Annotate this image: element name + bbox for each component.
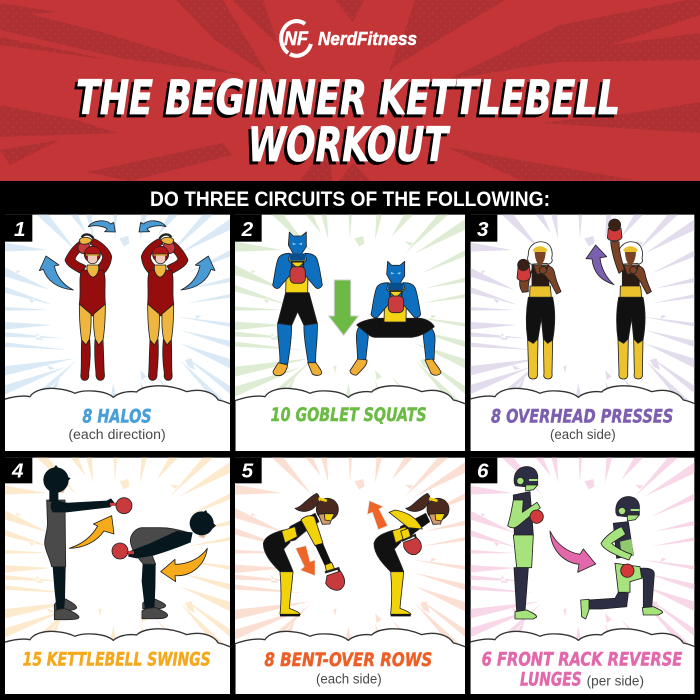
arrow: down xyxy=(296,546,315,576)
header burst streaks xyxy=(0,0,700,181)
figure: arm lowered xyxy=(263,493,345,615)
logo monogram: NF xyxy=(284,29,309,50)
header band xyxy=(0,0,700,181)
arrow: up swing xyxy=(69,516,114,548)
figure: right hero xyxy=(141,234,188,380)
title: WORKOUT xyxy=(248,118,451,173)
subtitle: DO THREE CIRCUITS OF THE FOLLOWING: xyxy=(150,187,550,211)
figure: squatting xyxy=(350,261,441,375)
figure: standing xyxy=(273,232,322,376)
number tab 3: 3 xyxy=(477,218,489,241)
panel 2: goblet squats xyxy=(235,210,468,453)
logo ring xyxy=(281,21,311,56)
exercise note: (per side) xyxy=(587,674,644,689)
number tab 4: 4 xyxy=(11,460,24,483)
arrow: up xyxy=(586,245,614,285)
number tab 1: 1 xyxy=(14,218,25,241)
figure: pressing xyxy=(607,219,651,379)
number tab 4 xyxy=(0,458,32,483)
number tab 1 xyxy=(0,215,32,242)
figure: standing xyxy=(508,467,543,619)
exercise name second line: LUNGES xyxy=(520,669,582,691)
figure: left hero xyxy=(65,234,112,380)
panel 5: bent-over rows xyxy=(235,453,468,696)
panel 3: overhead presses xyxy=(465,210,698,453)
number tab 2: 2 xyxy=(241,218,254,241)
figure: lunging xyxy=(581,497,663,619)
number tab 2 xyxy=(235,215,262,242)
exercise name: 8 HALOS xyxy=(82,405,152,427)
panel 1: halos xyxy=(0,210,233,453)
number tab 5: 5 xyxy=(242,460,254,483)
arrows: right xyxy=(139,221,215,290)
arrow: to lunge xyxy=(550,531,596,572)
figure: arm raised xyxy=(374,493,449,615)
title xyxy=(76,71,620,173)
arrow: down swing xyxy=(161,548,207,582)
panel 4: kettlebell swings xyxy=(0,453,233,696)
arrows: left xyxy=(39,221,115,290)
figure: arms raised xyxy=(43,465,132,620)
logo xyxy=(281,21,417,56)
number tab 6 xyxy=(465,458,497,483)
arrow: down xyxy=(329,280,358,335)
exercise name: 15 KETTLEBELL SWINGS xyxy=(23,648,211,670)
number tab 5 xyxy=(235,458,262,483)
logo wordmark: NerdFitness xyxy=(318,29,417,49)
panel 6: front rack reverse lunges xyxy=(465,453,698,696)
number tab 6: 6 xyxy=(477,460,489,483)
exercise note: (each side) xyxy=(550,427,616,442)
figure: rack position xyxy=(517,242,561,379)
exercise name: 10 GOBLET SQUATS xyxy=(271,404,427,426)
figure: bent over xyxy=(112,510,216,619)
number tab 3 xyxy=(465,215,497,242)
arrow: up xyxy=(367,501,388,530)
exercise note: (each direction) xyxy=(68,427,166,442)
exercise name: 8 BENT-OVER ROWS xyxy=(264,649,432,671)
exercise note: (each side) xyxy=(316,672,382,687)
